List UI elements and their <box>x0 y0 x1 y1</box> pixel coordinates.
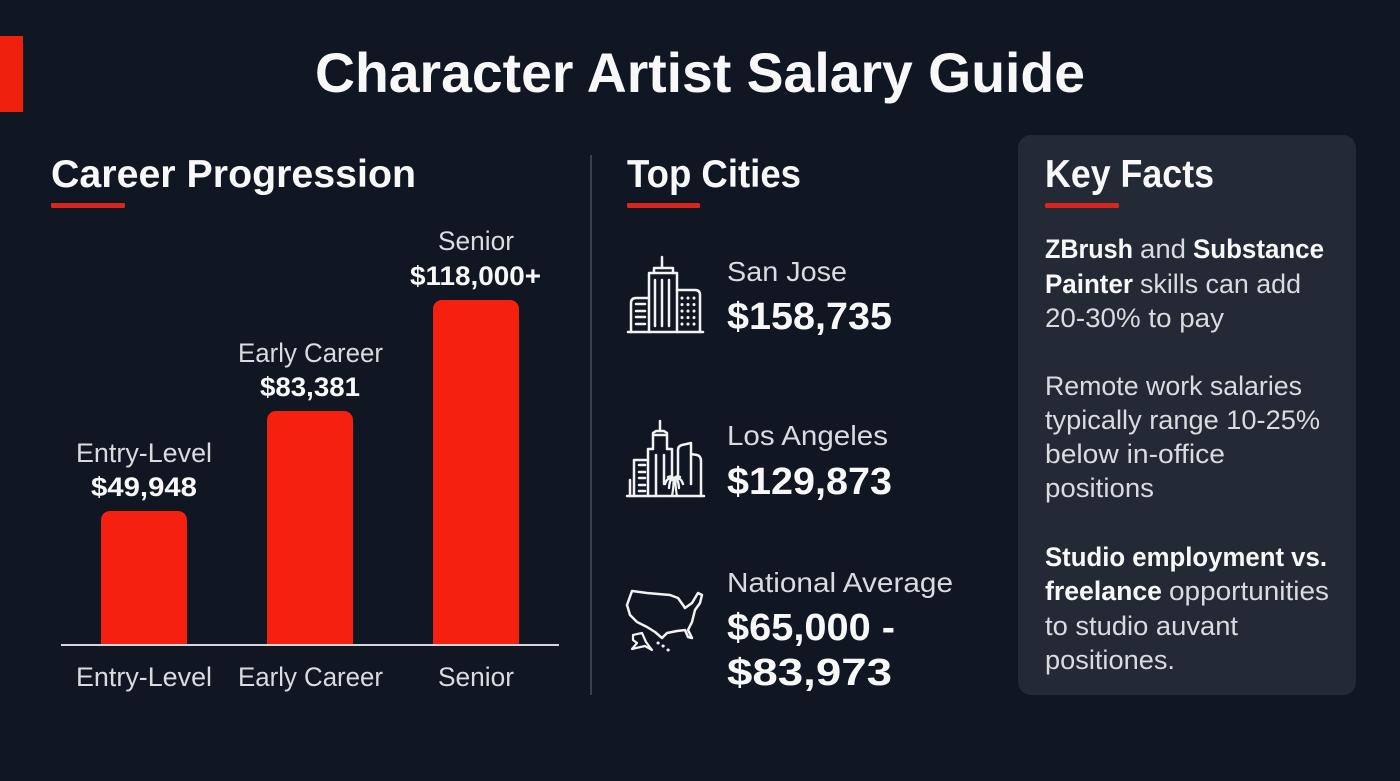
label: early career value: Early Career <box>238 338 383 368</box>
axis labels <box>76 662 514 692</box>
city: los angeles: $129,873 <box>727 461 892 503</box>
fact: software skills <box>1045 234 1324 333</box>
icon: us map <box>627 591 702 650</box>
axis labels: Entry-Level <box>76 662 212 692</box>
axis labels: Early Career <box>238 662 383 692</box>
stat: national average: $65,000 - <box>727 607 895 649</box>
heading: top cities: Top Cities <box>627 153 801 196</box>
fact: software skills: Painter <box>1045 269 1133 299</box>
city: san jose: $158,735 <box>727 296 892 338</box>
icon: los angeles skyline with palm <box>627 421 704 496</box>
title: Character Artist Salary Guide <box>315 41 1085 104</box>
fact: software skills: ZBrush <box>1045 234 1133 264</box>
label: early career value <box>238 338 383 402</box>
accent tab <box>0 36 23 112</box>
label: early career value: $83,381 <box>260 372 360 402</box>
fact: software skills: and <box>1140 234 1186 264</box>
panel: key facts <box>1018 135 1356 695</box>
city: san jose <box>727 256 892 338</box>
fact: studio vs freelance <box>1045 542 1329 675</box>
fact: studio vs freelance: freelance <box>1045 576 1162 606</box>
bar: senior <box>433 300 519 645</box>
heading: key facts: Key Facts <box>1045 153 1214 196</box>
icon: skyscrapers <box>628 257 703 332</box>
stat: national average: $83,973 <box>727 652 892 694</box>
label: entry-level value <box>76 438 212 502</box>
fact: studio vs freelance: opportunities <box>1169 576 1329 606</box>
fact: remote work: Remote work salaries <box>1045 371 1302 401</box>
fact: studio vs freelance: Studio employment vs. <box>1045 542 1327 572</box>
fact: remote work <box>1045 371 1320 503</box>
label: entry-level value: Entry-Level <box>76 438 212 468</box>
bar chart <box>61 226 559 692</box>
label: senior value <box>410 226 541 291</box>
fact: remote work: below in-office <box>1045 439 1225 469</box>
label: senior value: Senior <box>438 226 514 256</box>
stat: national average <box>727 567 953 694</box>
heading: career progression: Career Progression <box>51 153 416 196</box>
fact: remote work: positions <box>1045 473 1154 503</box>
label: senior value: $118,000+ <box>410 261 541 291</box>
fact: software skills: Substance <box>1193 234 1324 264</box>
label: entry-level value: $49,948 <box>91 472 197 502</box>
fact: studio vs freelance: positiones. <box>1045 645 1175 675</box>
city: los angeles <box>727 420 892 503</box>
fact: software skills: 20-30% to pay <box>1045 303 1225 333</box>
bar: early career <box>267 411 353 645</box>
stat: national average: National Average <box>727 567 953 598</box>
axis labels: Senior <box>438 662 514 692</box>
bar: entry-level <box>101 511 187 645</box>
city: los angeles: Los Angeles <box>727 420 888 451</box>
fact: software skills: skills can add <box>1140 269 1301 299</box>
city: san jose: San Jose <box>727 256 847 287</box>
panel: top cities <box>627 153 953 694</box>
panel: career progression <box>51 153 559 692</box>
fact: remote work: typically range 10-25% <box>1045 405 1320 435</box>
fact: studio vs freelance: to studio auvant <box>1045 611 1238 641</box>
